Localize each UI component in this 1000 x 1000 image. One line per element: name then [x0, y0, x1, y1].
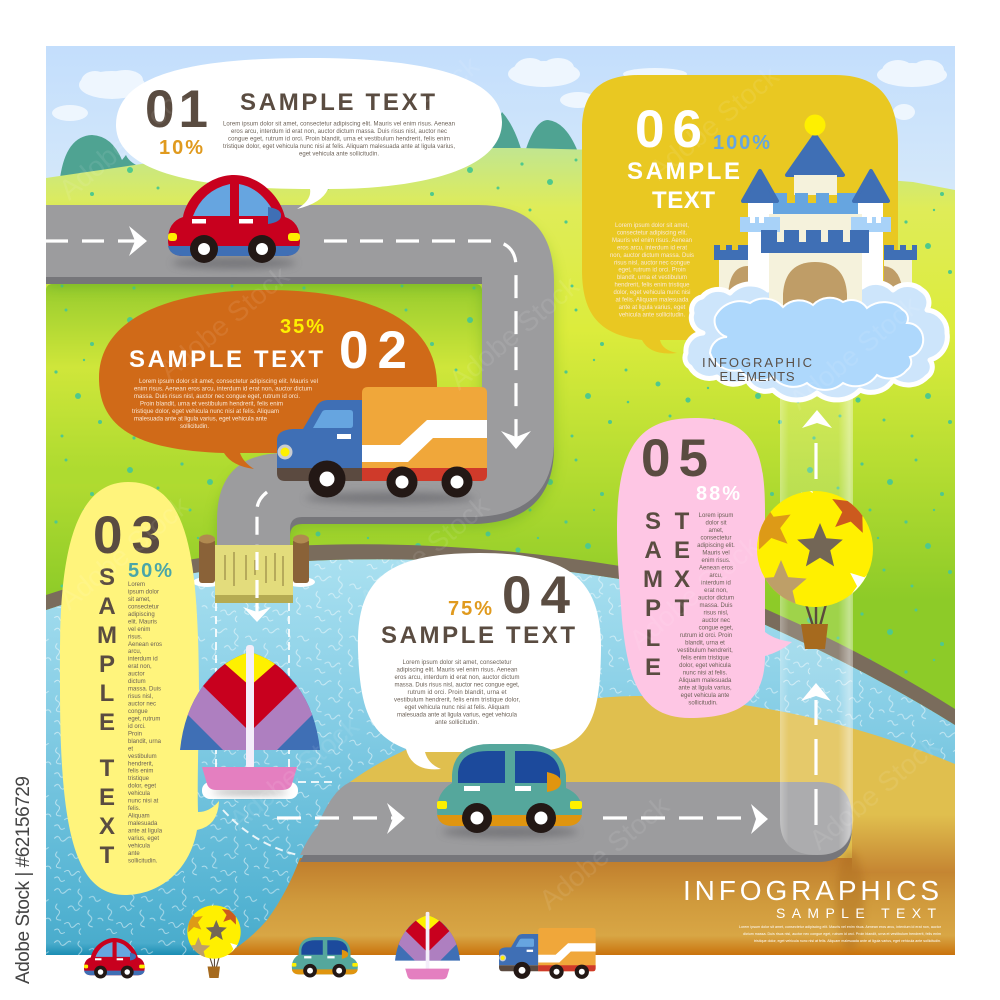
body 03: Aliquam: [128, 814, 150, 820]
body 03: auctor nec: [128, 702, 156, 708]
body 04: Lorem ipsum dolor sit amet, consectetur: [402, 660, 512, 666]
body 01: eget vehicula ante sollicitudin.: [299, 152, 379, 158]
vertical heading 05: P: [645, 595, 661, 622]
body 03: dictum: [128, 679, 146, 685]
body 05: interdum id: [701, 580, 731, 586]
dashed route on water: [216, 603, 333, 855]
body 05: dolor sit: [705, 520, 727, 526]
body 03: sit amet,: [128, 597, 151, 603]
body 05: nunc nisi at felis.: [683, 670, 728, 676]
body 02: sollicitudin.: [180, 424, 209, 430]
body 03: vehicula: [128, 843, 151, 849]
river bank: [46, 544, 955, 725]
icon: star balloon: [741, 475, 895, 649]
body 06: non, auctor dictum massa. Duis: [610, 253, 694, 259]
body 06: hendrerit, felis enim tristique: [614, 283, 690, 289]
number 03: 03: [93, 506, 161, 565]
road markings: lower road: [277, 803, 768, 834]
body 03: et: [128, 746, 133, 752]
vertical heading 05: A: [644, 537, 662, 564]
vertical heading 05: S: [645, 508, 661, 535]
body 03: auctor: [128, 672, 145, 678]
percent 50: 50%: [128, 560, 172, 582]
body 02: tristique dolor, eget vehicula nunc nisi at felis. Aliquam: [132, 409, 279, 415]
lower road: [300, 782, 852, 855]
percent 10: 10%: [159, 137, 203, 159]
body 05: risus nisl,: [703, 610, 729, 616]
body 03: Lorem: [128, 582, 145, 588]
body 04: eget vehicula nunc nisi at felis. Aliquam: [404, 705, 510, 711]
vertical heading 03: X: [99, 813, 115, 840]
body 06: eros arcu, interdum id erat: [617, 245, 687, 251]
vertical heading 05: T: [675, 595, 690, 622]
body 05: Mauris vel: [702, 550, 730, 556]
watermark text: Adobe Stock: [353, 489, 495, 616]
body 03: congue: [128, 709, 148, 715]
body 03: risus nisl,: [128, 694, 153, 700]
body 03: elit. Mauris: [128, 619, 157, 625]
heading 04: SAMPLE TEXT: [381, 622, 575, 649]
body 03: arcu,: [128, 649, 142, 655]
watermark text: Adobe Stock: [533, 789, 675, 916]
subtitle: SAMPLE TEXT: [776, 905, 936, 921]
watermark text: Adobe Stock: [443, 269, 585, 396]
footer body: [739, 925, 942, 943]
cloud top: [710, 298, 923, 390]
grass: [46, 148, 955, 760]
body 03: consectetur: [128, 604, 159, 610]
vertical heading 03: L: [100, 680, 114, 707]
body 01: eros arcu, interdum id erat non, auctor dictum massa. Duis risus nisl, auctor nec: [231, 129, 447, 135]
panel 06: gold bubble: [582, 75, 898, 353]
vertical heading 05: T: [675, 508, 690, 535]
cloud caption: ELEMENTS: [720, 369, 795, 384]
body 03: tristique: [128, 776, 150, 782]
body 05: enim risus.: [701, 558, 731, 564]
vertical heading 03: T: [100, 755, 115, 782]
vertical heading 03: P: [99, 651, 115, 678]
body 05: consectetur: [700, 536, 732, 542]
watermark text: Adobe Stock: [643, 59, 785, 186]
mini balloon: [180, 898, 251, 978]
body 03: interdum id: [128, 657, 158, 663]
body 04: malesuada ante at ligula varius, eget vehicula: [397, 712, 518, 718]
vertical heading 05: L: [646, 625, 660, 652]
watermark text: Adobe Stock: [623, 529, 765, 656]
sand fade right of road: [852, 823, 955, 867]
body 03: erat non,: [128, 664, 152, 670]
bridge: [193, 534, 315, 603]
body 03: id orci.: [128, 724, 146, 730]
body 03: malesuada: [128, 821, 158, 827]
icon: sailing boat: [175, 640, 325, 799]
watermark text: Adobe Stock: [153, 259, 295, 386]
body 06: at felis. Aliquam malesuada: [615, 298, 689, 304]
body 05: felis enim tristique: [681, 656, 730, 662]
body 06: Mauris vel enim risus. Aenean: [612, 238, 692, 244]
lower road side: [300, 823, 852, 862]
vertical heading 03: T: [100, 842, 115, 869]
heading 06: TEXT: [652, 187, 715, 214]
body 03: blandit, urna: [128, 739, 162, 745]
footer body: tristique dolor, eget vehicula nunc nisi at felis. Aliquam malesuada ante at ligula varius, eget vehicula ante sollicitudin.: [754, 939, 941, 943]
road markings: upper road: [46, 226, 531, 625]
body 06: risus nisl, auctor nec congue: [614, 260, 691, 266]
body 03: ipsum dolor: [128, 590, 159, 596]
body 03: risus.: [128, 634, 143, 640]
body 05: Aenean eros: [699, 566, 733, 572]
legend row: mini icons: [84, 898, 596, 979]
percent 35: 35%: [280, 316, 324, 338]
body 06: Lorem ipsum dolor sit amet,: [615, 223, 689, 229]
body 03: Proin: [128, 731, 142, 737]
body 05: sollicitudin.: [688, 700, 718, 706]
vertical heading 03: A: [98, 593, 116, 620]
heading 01: SAMPLE TEXT: [240, 89, 435, 116]
upper road: [46, 205, 554, 550]
body 06: consectetur adipiscing elit.: [617, 230, 688, 236]
clouds in sky: [52, 58, 947, 121]
cloud base: [685, 280, 947, 400]
body 02: massa. Duis risus nisl, auctor nec congue eget, rutrum id orci.: [134, 394, 300, 400]
body 03: felis.: [128, 806, 141, 812]
vertical heading 05: E: [674, 537, 690, 564]
icon: red car: [168, 175, 300, 263]
watermark text: Adobe Stock: [53, 79, 195, 206]
vertical heading 05: X: [674, 566, 690, 593]
mini truck: [499, 928, 596, 979]
body 05: arcu,: [709, 573, 723, 579]
watermark text: Adobe Stock: [783, 289, 925, 416]
body 05: Lorem ipsum: [699, 513, 733, 519]
body 06: blandit, urna et vestibulum: [617, 275, 687, 281]
vertical heading 03: S: [99, 564, 115, 591]
watermark text: Adobe Stock: [53, 489, 195, 616]
body 01: Lorem ipsum dolor sit amet, consectetur adipiscing elit. Mauris vel enim risus. Aenean: [223, 122, 455, 128]
body 04: vestibulum hendrerit, felis enim tristique dolor,: [394, 698, 520, 704]
body 05: massa. Duis: [699, 603, 733, 609]
number 01: 01: [145, 80, 208, 139]
road shadow on grass: [46, 215, 554, 560]
body 05: auctor nec: [702, 618, 730, 624]
body 03: ante: [128, 851, 140, 857]
footer title block: [683, 875, 942, 943]
body 06: dolor, eget vehicula nunc nisi: [613, 290, 691, 296]
body 03: sollicitudin.: [128, 858, 158, 864]
body 03: adipiscing: [128, 612, 155, 618]
body 03: vel enim: [128, 627, 150, 633]
watermark text: Adobe Stock: [223, 709, 365, 836]
body 04: rutrum id orci. Proin blandit, urna et: [408, 690, 507, 696]
panel 02: orange bubble: [99, 290, 437, 469]
panel 03: yellow bubble: [60, 482, 219, 895]
mini boat: [393, 910, 462, 979]
body 03: varius, eget: [128, 836, 159, 842]
body 04: [394, 660, 520, 726]
road markings: vertical route: [801, 410, 832, 825]
body 05: erat non,: [704, 588, 728, 594]
body 01: congue eget, rutrum id orci. Proin blandit, urna et vestibulum hendrerit, felis enim: [228, 136, 450, 142]
vertical heading 03: M: [97, 622, 117, 649]
body 03: vehicula: [128, 791, 151, 797]
heading 02: SAMPLE TEXT: [129, 346, 323, 373]
body 05: dolor, eget vehicula: [679, 663, 732, 669]
body 02: [132, 379, 318, 430]
sand island: [300, 696, 955, 862]
panel 04: white bubble: [358, 553, 601, 769]
mini red car: [84, 938, 145, 978]
sky: [46, 46, 955, 206]
body 02: Lorem ipsum dolor sit amet, consectetur adipiscing elit. Mauris vel: [139, 379, 318, 385]
body 05: eget vehicula ante: [681, 693, 730, 699]
body 03: nunc nisi at: [128, 799, 159, 805]
heading 06: SAMPLE: [627, 158, 740, 185]
vehicle shadows: [172, 257, 578, 838]
body 01: [223, 122, 455, 158]
body 03: hendrerit,: [128, 761, 154, 767]
body 05: amet,: [708, 528, 724, 534]
upper road side: [46, 277, 554, 536]
percent 75: 75%: [448, 598, 492, 620]
body 01: tristique dolor, eget vehicula nunc nisi at felis. Aliquam malesuada ante at ligula varius,: [223, 144, 455, 150]
footer body: Lorem ipsum dolor sit amet, consectetur adipiscing elit. Mauris vel enim risus. Aenean eros arcu, interdum id erat non, auctor: [739, 925, 942, 929]
tube of light: [780, 380, 853, 855]
icon: truck: [277, 387, 487, 498]
stock id label: Adobe Stock | #62156729: [13, 776, 34, 984]
vertical heading 05: E: [645, 654, 661, 681]
vertical heading 05: M: [643, 566, 663, 593]
body 06: ante at ligula varius, eget: [619, 305, 686, 311]
watermark text: Adobe Stock: [803, 729, 945, 856]
grass dots: [46, 148, 955, 760]
body 05: blandit, urna et: [685, 640, 725, 646]
body 02: Proin blandit, urna et vestibulum hendrerit, felis enim: [140, 402, 283, 408]
number 06: 06: [635, 100, 702, 159]
body 06: vehicula ante sollicitudin.: [619, 312, 686, 318]
body 05: auctor dictum: [698, 596, 734, 602]
inner grass: [46, 284, 482, 362]
vertical heading 03: E: [99, 709, 115, 736]
body 02: malesuada ante at ligula varius, eget vehicula ante: [134, 416, 268, 422]
body 04: eros arcu, interdum id erat non, auctor dictum: [394, 675, 520, 681]
number 02: 02: [339, 321, 407, 380]
percent 100: 100%: [713, 132, 770, 154]
body 03: vestibulum: [128, 754, 157, 760]
body 05: adipiscing elit.: [697, 543, 735, 549]
number 05: 05: [641, 429, 708, 488]
body 03: Aenean eros: [128, 642, 162, 648]
body 05: ante at ligula varius,: [678, 686, 732, 692]
body 05: rutrum id orci. Proin: [680, 633, 732, 639]
body 03: ante at ligula: [128, 828, 163, 834]
icon: castle on cloud: [685, 114, 947, 400]
body 02: enim risus. Aenean eros arcu, interdum id erat non, auctor dictum: [134, 386, 312, 392]
title: INFOGRAPHICS: [683, 875, 939, 906]
body 05: vestibulum hendrerit,: [677, 648, 733, 654]
body 05: Aliquam malesuada: [679, 678, 732, 684]
percent 88: 88%: [696, 483, 740, 505]
icon: green car: [437, 744, 582, 833]
distant hills: [60, 112, 578, 178]
body 04: ante sollicitudin.: [435, 720, 479, 726]
body 05: congue eget,: [699, 626, 734, 632]
panel 01: white bubble: [116, 58, 502, 209]
orange shore: [225, 858, 955, 955]
body 03: dolor, eget: [128, 784, 156, 790]
body 06: eget, rutrum id orci. Proin: [618, 268, 686, 274]
shadow beside lower road: [836, 850, 864, 950]
water: [46, 559, 955, 955]
watermark text: Adobe Stock: [343, 49, 485, 176]
mini green car: [292, 937, 358, 978]
body 04: massa. Duis risus nisl, auctor nec congue eget,: [394, 682, 520, 688]
body 03: felis enim: [128, 769, 153, 775]
footer body: dictum massa. Duis risus nisl, auctor nec congue eget, rutrum id orci. Proin blandit, urna et vestibulum hendrerit, felis enim: [743, 932, 941, 936]
body 03: eget, rutrum: [128, 716, 160, 722]
vertical heading 03: E: [99, 784, 115, 811]
watermark text: [53, 49, 945, 916]
cloud caption: INFOGRAPHIC: [702, 355, 812, 370]
number 04: 04: [502, 566, 571, 625]
panel 05: pink bubble: [617, 418, 792, 718]
body 04: adipiscing elit. Mauris vel enim risus. Aenean: [396, 668, 518, 674]
body 03: massa. Duis: [128, 687, 161, 693]
